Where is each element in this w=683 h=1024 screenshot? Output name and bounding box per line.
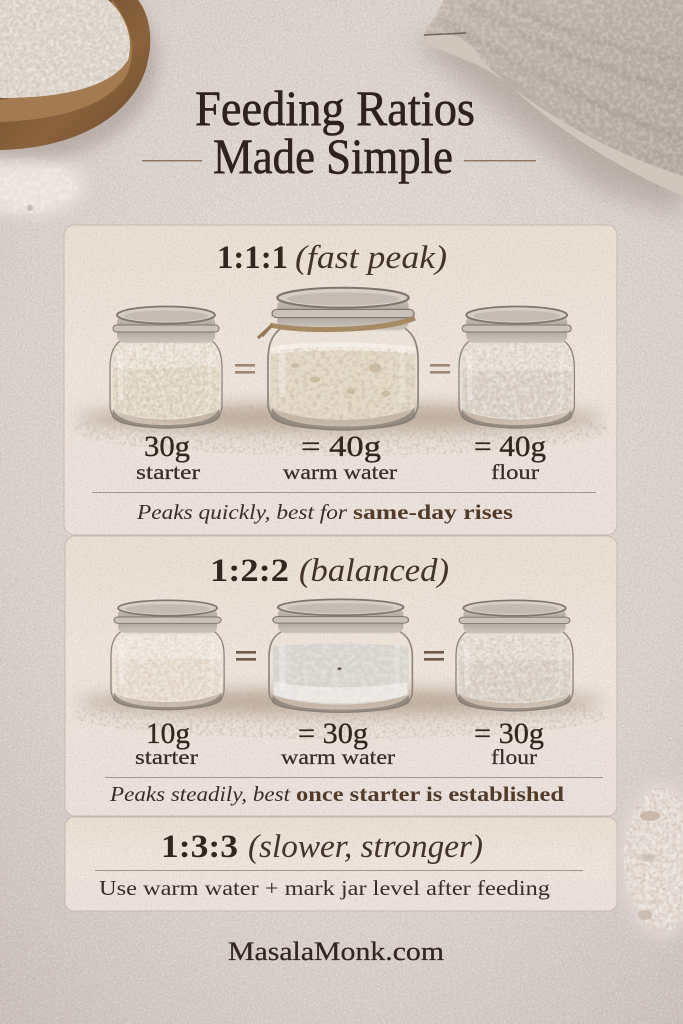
title: Feeding Ratios	[195, 80, 475, 136]
flour bowl	[0, 0, 158, 160]
heading: 1:1:1	[217, 240, 447, 276]
note: once starter is established: once starter is established	[296, 782, 564, 806]
panel: 1:2:2 balanced	[65, 536, 617, 816]
jar: starter 10g	[111, 600, 224, 710]
heading: 1:1:1: 1:1:1	[217, 240, 288, 276]
jar: warm water 30g	[269, 599, 412, 712]
jar: starter 30g	[110, 306, 222, 428]
amount: flour: flour	[491, 745, 537, 769]
note: once starter is established	[109, 782, 564, 806]
amount: starter	[136, 430, 200, 484]
note: same-day rises: same-day rises	[353, 500, 513, 524]
amount: starter: 30g	[144, 430, 190, 463]
heading: 1:3:3: (slower, stronger)	[248, 829, 483, 865]
note: same-day rises: Peaks quickly, best for	[136, 500, 348, 524]
flour scatter	[72, 689, 608, 739]
equals sign	[236, 651, 256, 661]
note: same-day rises	[136, 500, 513, 524]
amount: warm water: warm water	[281, 745, 395, 769]
jar: flour 30g	[456, 600, 573, 711]
note: warm water tip: Use warm water + mark jar level after feeding	[99, 876, 551, 900]
title: Made Simple	[213, 128, 453, 184]
flour scatter	[72, 404, 608, 456]
towel	[410, 0, 683, 215]
panel: 1:1:1 fast peak	[64, 225, 617, 535]
heading: 1:1:1: (fast peak)	[295, 240, 447, 276]
amount: flour	[474, 430, 546, 484]
amount: warm water: = 40g	[301, 430, 381, 463]
amount: flour: = 40g	[474, 430, 546, 463]
heading: 1:2:2: (balanced)	[299, 553, 449, 589]
jar: flour 40g	[459, 306, 574, 428]
equals sign	[424, 651, 444, 661]
flour pile right	[620, 782, 683, 938]
amount: flour: = 30g	[474, 717, 544, 750]
note: once starter is established: Peaks steadily, best	[109, 782, 291, 806]
amount: warm water: = 30g	[298, 717, 368, 750]
heading: 1:2:2: 1:2:2	[210, 553, 289, 589]
amount: starter: starter	[135, 745, 198, 769]
panel: 1:3:3 slower, stronger	[65, 817, 617, 911]
title	[142, 80, 536, 184]
amount: warm water: warm water	[283, 460, 397, 484]
equals sign	[430, 364, 450, 374]
amount: starter: starter	[136, 460, 200, 484]
amount: starter	[135, 717, 198, 769]
twine	[258, 318, 415, 338]
amount: starter: 10g	[146, 717, 190, 750]
amount: warm water	[281, 717, 395, 769]
equals sign	[235, 364, 255, 374]
jar: warm water 40g	[268, 288, 418, 430]
amount: warm water	[283, 430, 397, 484]
footer: website: MasalaMonk.com	[228, 937, 444, 966]
amount: flour	[474, 717, 544, 769]
heading: 1:2:2	[210, 553, 449, 589]
flour spill below bowl	[0, 155, 85, 215]
amount: flour: flour	[491, 460, 539, 484]
heading: 1:3:3: 1:3:3	[161, 829, 238, 865]
